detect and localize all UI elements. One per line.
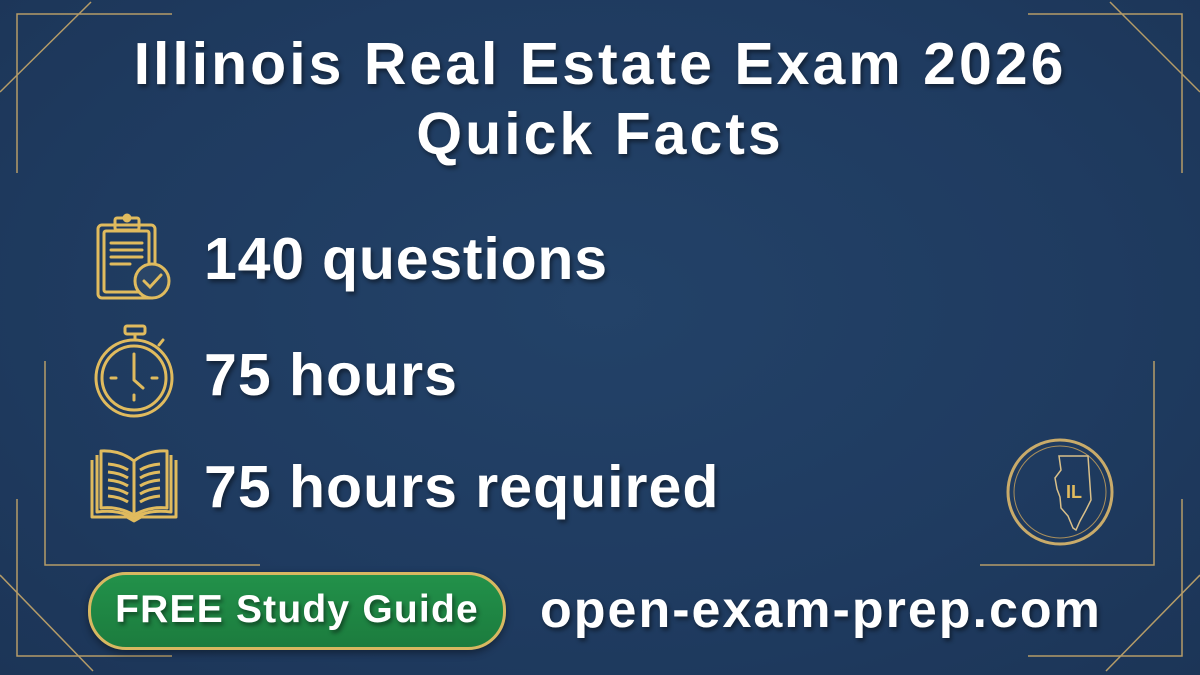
button: FREE Study Guide: FREE Study Guide bbox=[115, 588, 479, 631]
icon: stopwatch bbox=[94, 324, 174, 418]
text: 140 questions: 140 questions bbox=[204, 226, 608, 292]
title: Illinois Real Estate Exam 2026 bbox=[134, 31, 1066, 97]
seal: Illinois badge bbox=[1006, 438, 1114, 546]
title bbox=[134, 31, 1066, 170]
seal: Illinois badge: IL bbox=[1066, 482, 1082, 502]
title: Quick Facts bbox=[416, 101, 784, 167]
text: website url: open-exam-prep.com bbox=[540, 581, 1102, 639]
button: FREE Study Guide bbox=[88, 572, 506, 650]
text: 75 hours: 75 hours bbox=[204, 342, 458, 408]
text: 75 hours required: 75 hours required bbox=[204, 454, 719, 520]
icon: open book bbox=[90, 449, 178, 522]
icon: clipboard bbox=[96, 214, 170, 300]
